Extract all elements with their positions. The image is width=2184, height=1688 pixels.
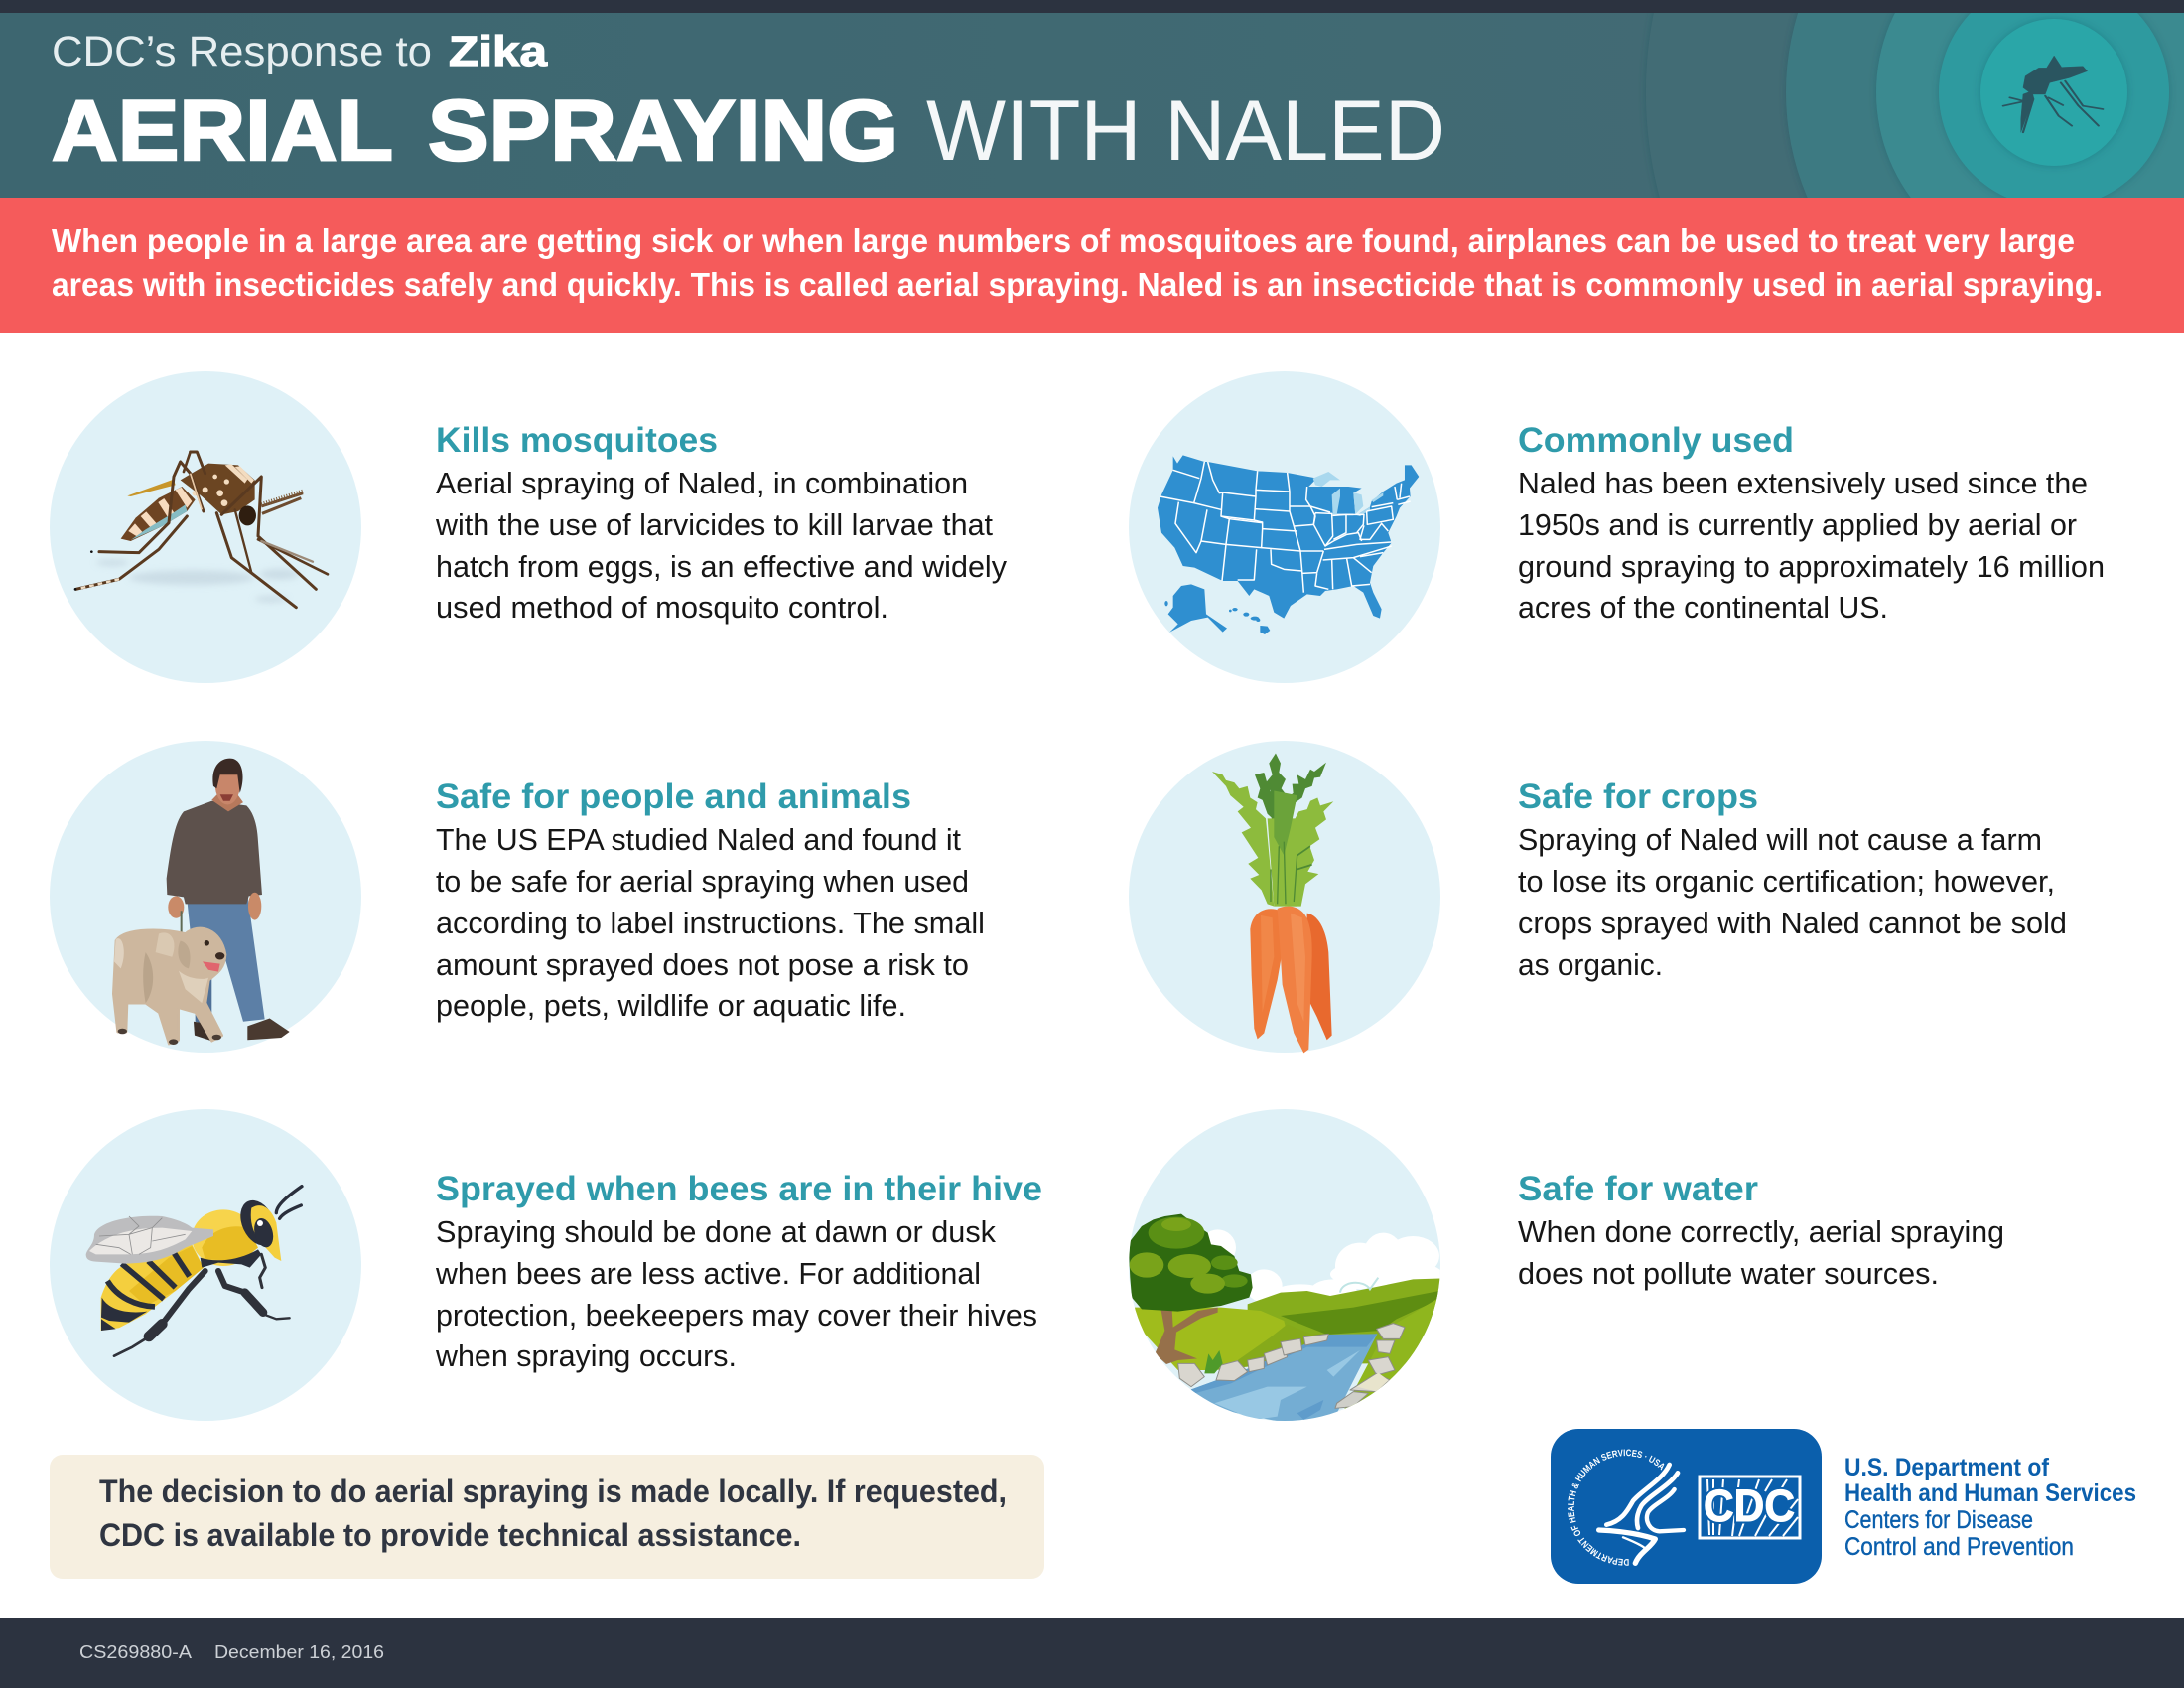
- heading: Safe for people and animals: [436, 777, 911, 816]
- callout: CDC is available to provide technical assistance.: [99, 1517, 801, 1553]
- icon: US map: [1129, 371, 1440, 683]
- scribble cloud: [1340, 1278, 1378, 1293]
- heading: Safe for water: [1518, 1170, 1758, 1208]
- icon: mosquito: [50, 371, 361, 683]
- footer: CS269880-A: [79, 1642, 192, 1662]
- panel: safe for water: [1122, 1105, 2004, 1430]
- body text: with the use of larvicides to kill larvae that: [435, 507, 993, 542]
- body text: crops sprayed with Naled cannot be sold: [1518, 906, 2067, 940]
- agency name: [1844, 1454, 2136, 1561]
- body text: Spraying should be done at dawn or dusk: [436, 1214, 996, 1249]
- body text: when bees are less active. For additional: [435, 1256, 981, 1291]
- intro banner: areas with insecticides safely and quickly. This is called aerial spraying. Naled is an insecticide that is commonly used in aerial spraying.: [52, 266, 2103, 303]
- kicker bold: Zika: [449, 28, 548, 75]
- body text: when spraying occurs.: [435, 1338, 737, 1373]
- body text: The US EPA studied Naled and found it: [436, 822, 961, 857]
- header banner: [0, 13, 2184, 198]
- footer: December 16, 2016: [214, 1642, 384, 1662]
- intro banner: When people in a large area are getting sick or when large numbers of mosquitoes are found, airplanes can be used to treat very large: [52, 222, 2075, 259]
- icon: bee: [50, 1109, 361, 1421]
- body text: ground spraying to approximately 16 million: [1518, 549, 2105, 584]
- panel: commonly used: [1129, 371, 2105, 683]
- icon: river landscape: [1122, 1105, 1452, 1430]
- callout: The decision to do aerial spraying is made locally. If requested,: [99, 1474, 1007, 1509]
- top bar: [0, 0, 2184, 13]
- icon: HHS seal: DEPARTMENT OF HEALTH & HUMAN SERVICES · USA: [1568, 1450, 1664, 1566]
- body text: [435, 1214, 1037, 1373]
- concentric target rings: [1645, 13, 2184, 198]
- body text: to lose its organic certification; however,: [1518, 864, 2055, 899]
- heading bold: SPRAYING: [428, 83, 898, 179]
- callout: [50, 1455, 1044, 1579]
- body text: When done correctly, aerial spraying: [1518, 1214, 2004, 1249]
- agency name: U.S. Department of: [1844, 1454, 2050, 1481]
- body text: [1518, 1214, 2004, 1291]
- body text: [1518, 822, 2067, 982]
- body text: as organic.: [1518, 947, 1663, 982]
- body text: 1950s and is currently applied by aerial or: [1518, 507, 2077, 542]
- body text: Spraying of Naled will not cause a farm: [1518, 822, 2042, 857]
- icon: mosquito silhouette: [2003, 56, 2103, 132]
- body text: Aerial spraying of Naled, in combination: [436, 466, 968, 500]
- footer: [0, 1618, 2184, 1688]
- icon: CDC box: CDC: [1704, 1480, 1795, 1531]
- body text: [1518, 466, 2105, 625]
- body text: amount sprayed does not pose a risk to: [436, 947, 969, 982]
- body text: protection, beekeepers may cover their hives: [436, 1298, 1037, 1333]
- icon: man walking dog: [50, 741, 361, 1053]
- body text: hatch from eggs, is an effective and widely: [436, 549, 1007, 584]
- panel: safe for people and animals: [50, 741, 985, 1053]
- body text: people, pets, wildlife or aquatic life.: [436, 988, 906, 1023]
- heading: Safe for crops: [1518, 777, 1758, 816]
- logo: HHS and CDC: [1551, 1429, 2136, 1584]
- heading: Kills mosquitoes: [436, 421, 718, 460]
- icon: carrots: [1129, 741, 1440, 1053]
- heading light: WITH NALED: [926, 83, 1445, 179]
- agency name: Centers for Disease: [1844, 1506, 2033, 1534]
- agency name: Health and Human Services: [1844, 1479, 2136, 1507]
- body text: does not pollute water sources.: [1518, 1256, 1939, 1291]
- heading: Commonly used: [1518, 421, 1794, 460]
- icon: CDC box: CDC: [1704, 1480, 1795, 1531]
- heading: Sprayed when bees are in their hive: [436, 1170, 1042, 1208]
- panel: safe for crops: [1129, 741, 2067, 1053]
- body text: [436, 822, 985, 1023]
- intro banner: [0, 198, 2184, 333]
- heading bold: [52, 83, 898, 179]
- kicker: CDC’s Response to: [52, 28, 432, 75]
- body text: according to label instructions. The small: [436, 906, 985, 940]
- agency name: Control and Prevention: [1844, 1533, 2074, 1561]
- body text: Naled has been extensively used since the: [1518, 466, 2088, 500]
- title block: [52, 28, 1445, 179]
- body text: [435, 466, 1007, 625]
- panel: kills mosquitoes: [50, 371, 1007, 683]
- body text: acres of the continental US.: [1518, 590, 1888, 625]
- heading bold: AERIAL: [52, 83, 393, 179]
- body text: to be safe for aerial spraying when used: [436, 864, 969, 899]
- panel: sprayed when bees are in their hive: [50, 1109, 1042, 1421]
- body text: used method of mosquito control.: [436, 590, 888, 625]
